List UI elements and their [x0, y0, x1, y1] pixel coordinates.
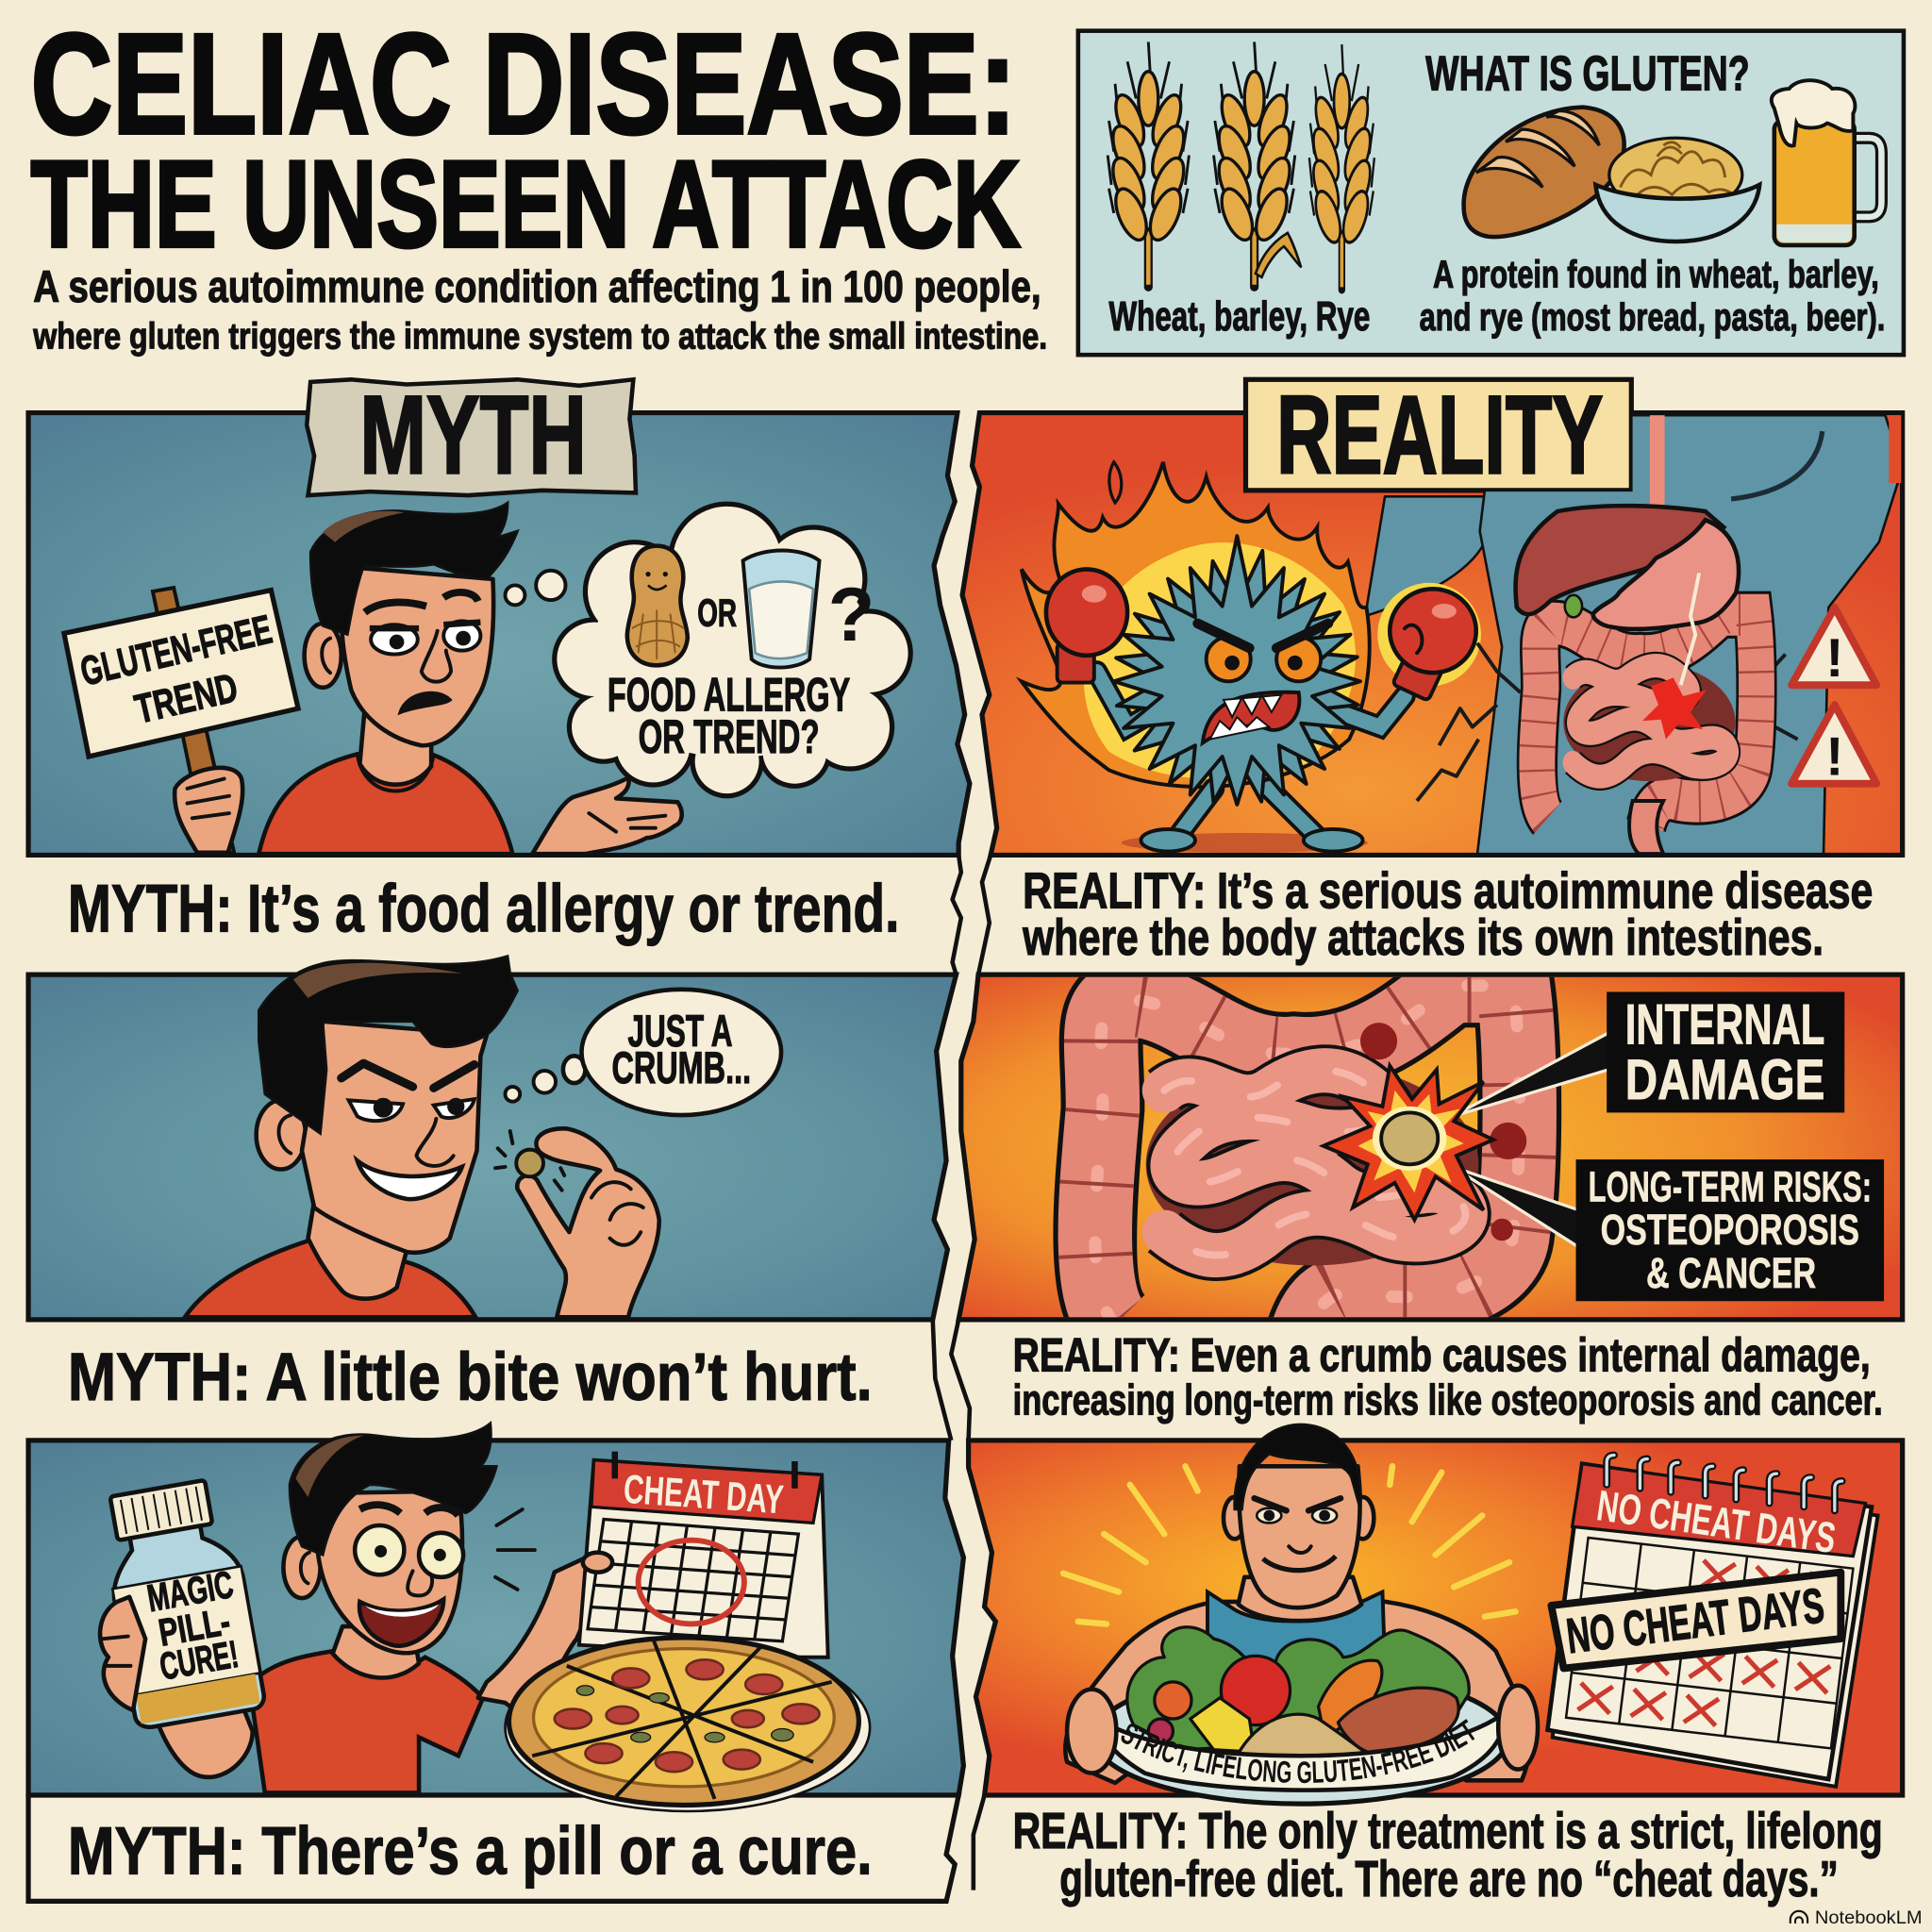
icon: pasta bowl — [1595, 138, 1759, 242]
torso and arm — [1365, 415, 1903, 854]
panel: myth 3 caption frame — [28, 1795, 958, 1901]
face features — [365, 592, 480, 712]
magic pill bottle: MAGIC — [144, 1562, 237, 1620]
tank top — [1208, 1592, 1385, 1663]
gluten-free trend sign: TREND — [131, 665, 242, 733]
hair — [1235, 1424, 1361, 1509]
text: food allergy or trend — [608, 669, 850, 763]
magic pill bottle: PILL- — [156, 1599, 233, 1655]
damage burst — [1642, 677, 1707, 740]
watermark: NotebookLM — [1815, 1907, 1923, 1928]
subtitle — [32, 261, 1047, 358]
text: question mark: ? — [828, 573, 874, 658]
gluten-free trend sign — [64, 591, 298, 757]
neck — [1239, 1577, 1361, 1621]
smirking features — [341, 1063, 475, 1199]
gallbladder — [1565, 595, 1582, 617]
cheat day calendar — [579, 1452, 828, 1657]
label: internal damage: INTERNAL — [1625, 992, 1824, 1056]
caption: reality 3 — [1013, 1804, 1883, 1907]
callout pointers — [1453, 1033, 1609, 1247]
raised arm right — [478, 1555, 610, 1723]
small thought bubbles — [506, 1071, 556, 1102]
intestines — [1537, 615, 1757, 825]
neck — [359, 708, 431, 785]
thought cloud — [552, 502, 913, 798]
panel: myth 1 background — [28, 413, 970, 855]
subtitle: A serious autoimmune condition affecting 1 in 100 people, — [33, 261, 1041, 311]
damage burst — [1324, 1066, 1493, 1220]
panel: reality 3 background — [969, 1441, 1903, 1795]
large intestine — [1095, 986, 1520, 1337]
label: long-term risks: & CANCER — [1646, 1249, 1816, 1297]
fingers on bottle — [100, 1597, 145, 1710]
illustration: man with crumb — [185, 957, 781, 1317]
illustration: germ boxing the gut — [1022, 415, 1903, 854]
panel: reality 1 background — [962, 413, 1903, 855]
plate — [1094, 1671, 1508, 1804]
speech cloud: CRUMB... — [611, 1042, 751, 1092]
crack — [1681, 573, 1699, 685]
shoulders and arms — [1065, 1602, 1529, 1783]
sun rays — [1063, 1466, 1516, 1624]
thumb on calendar — [583, 1553, 612, 1573]
lesions — [1360, 1023, 1526, 1241]
germ feet — [1141, 829, 1363, 852]
right boxing glove — [1377, 583, 1481, 701]
open hand — [532, 777, 682, 854]
cheat day calendar: CHEAT DAY — [622, 1467, 785, 1524]
illustration: strong man with plate — [1060, 1423, 1880, 1807]
excited face — [355, 1505, 463, 1646]
stomach — [1593, 520, 1739, 629]
warning triangles: ! — [1825, 727, 1843, 788]
face — [1239, 1466, 1360, 1607]
rectum — [1629, 801, 1663, 854]
label: wheat barley rye: Wheat, barley, Rye — [1109, 294, 1370, 340]
small intestine — [1146, 1063, 1478, 1265]
heading: what is gluten: WHAT IS GLUTEN? — [1425, 46, 1750, 101]
panel: reality 2 background — [958, 974, 1903, 1320]
germ angry face — [1198, 624, 1328, 743]
speech cloud — [563, 990, 781, 1115]
plate banner text: STRICT, LIFELONG GLUTEN-FREE DIET — [1121, 1719, 1475, 1783]
text: protein definition — [1420, 252, 1885, 339]
title: THE UNSEEN ATTACK — [31, 135, 1020, 273]
arc guide — [1119, 1731, 1485, 1783]
text: or: OR — [697, 591, 737, 635]
germ limbs — [1096, 672, 1405, 838]
hair — [290, 1424, 496, 1555]
face — [318, 1491, 462, 1653]
face — [341, 567, 493, 745]
flames — [1022, 462, 1370, 787]
ear — [305, 624, 341, 688]
hand holding sign — [175, 768, 242, 853]
neck — [333, 1626, 419, 1677]
panel: myth 2 background — [28, 974, 957, 1320]
warning triangles — [1791, 608, 1876, 788]
magic pill bottle: CURE! — [157, 1632, 242, 1689]
neck — [308, 1201, 407, 1299]
ears — [1224, 1497, 1374, 1539]
hair — [310, 503, 518, 635]
no cheat days calendar — [1547, 1456, 1878, 1787]
thought bubbles small — [506, 571, 566, 605]
illustration: skeptical man with sign — [64, 502, 913, 854]
caption: myth 3: MYTH: There’s a pill or a cure. — [68, 1814, 873, 1890]
shirt — [185, 1241, 475, 1317]
floor shadow — [1122, 833, 1368, 853]
text: food allergy or trend: OR TREND? — [639, 710, 820, 763]
title: CELIAC DISEASE: — [31, 5, 1017, 164]
label: internal damage — [1607, 991, 1844, 1112]
crumb sparkle lines — [495, 1131, 564, 1191]
banner: MYTH: MYTH — [359, 374, 587, 497]
subtitle: where gluten triggers the immune system to attack the small intestine. — [32, 317, 1047, 358]
torn paper edges in caption gaps — [933, 855, 991, 1890]
hair — [258, 957, 518, 1134]
icon: peanut — [627, 546, 688, 665]
lightning sparks — [1417, 643, 1798, 801]
hand holding crumb — [517, 1128, 659, 1317]
gluten-free trend sign: GLUTEN-FREE — [76, 607, 276, 695]
label: internal damage: DAMAGE — [1625, 1048, 1824, 1111]
speech cloud: JUST A — [627, 1006, 732, 1056]
icon: beer mug — [1772, 80, 1881, 245]
vegetables — [1127, 1627, 1469, 1756]
banner: REALITY: REALITY — [1276, 374, 1603, 497]
hands — [1067, 1686, 1538, 1774]
caption: reality 1 — [1022, 864, 1873, 966]
title — [31, 5, 1020, 273]
collar — [358, 754, 434, 791]
determined features — [1255, 1498, 1341, 1571]
panel: myth 3 background — [28, 1441, 963, 1795]
plate banner — [1095, 1710, 1508, 1790]
raised arm left — [154, 1700, 253, 1777]
label: long-term risks — [1576, 1159, 1884, 1301]
left boxing glove — [1046, 569, 1127, 683]
excitement lines — [495, 1509, 535, 1590]
text: food allergy or trend: FOOD ALLERGY — [608, 669, 850, 722]
pizza — [506, 1638, 870, 1811]
shirt — [241, 1651, 483, 1792]
crumb — [516, 1150, 543, 1176]
face — [302, 1022, 487, 1253]
stamp: no cheat days — [1551, 1573, 1840, 1668]
caption: myth 2: MYTH: A little bite won’t hurt. — [68, 1340, 873, 1415]
ear — [283, 1537, 321, 1598]
sign post — [153, 588, 234, 853]
magic pill bottle — [97, 1476, 266, 1729]
panel: what is gluten — [1078, 31, 1904, 355]
illustration: intestine damage — [1095, 986, 1526, 1337]
icon: notebooklm logo — [1790, 1911, 1807, 1924]
warning triangles: ! — [1825, 628, 1843, 689]
icon: wheat stalks — [1107, 42, 1375, 290]
germ body — [1092, 527, 1383, 825]
ear — [257, 1100, 306, 1170]
icon: glass of milk — [743, 551, 820, 668]
illustration: man with pill and pizza — [97, 1424, 870, 1811]
liver — [1516, 506, 1724, 614]
icon: bread loaf — [1464, 108, 1624, 237]
caption: myth 1: MYTH: It’s a food allergy or trend. — [68, 871, 899, 946]
man torso — [258, 754, 512, 854]
caption: reality 2 — [1013, 1329, 1883, 1424]
